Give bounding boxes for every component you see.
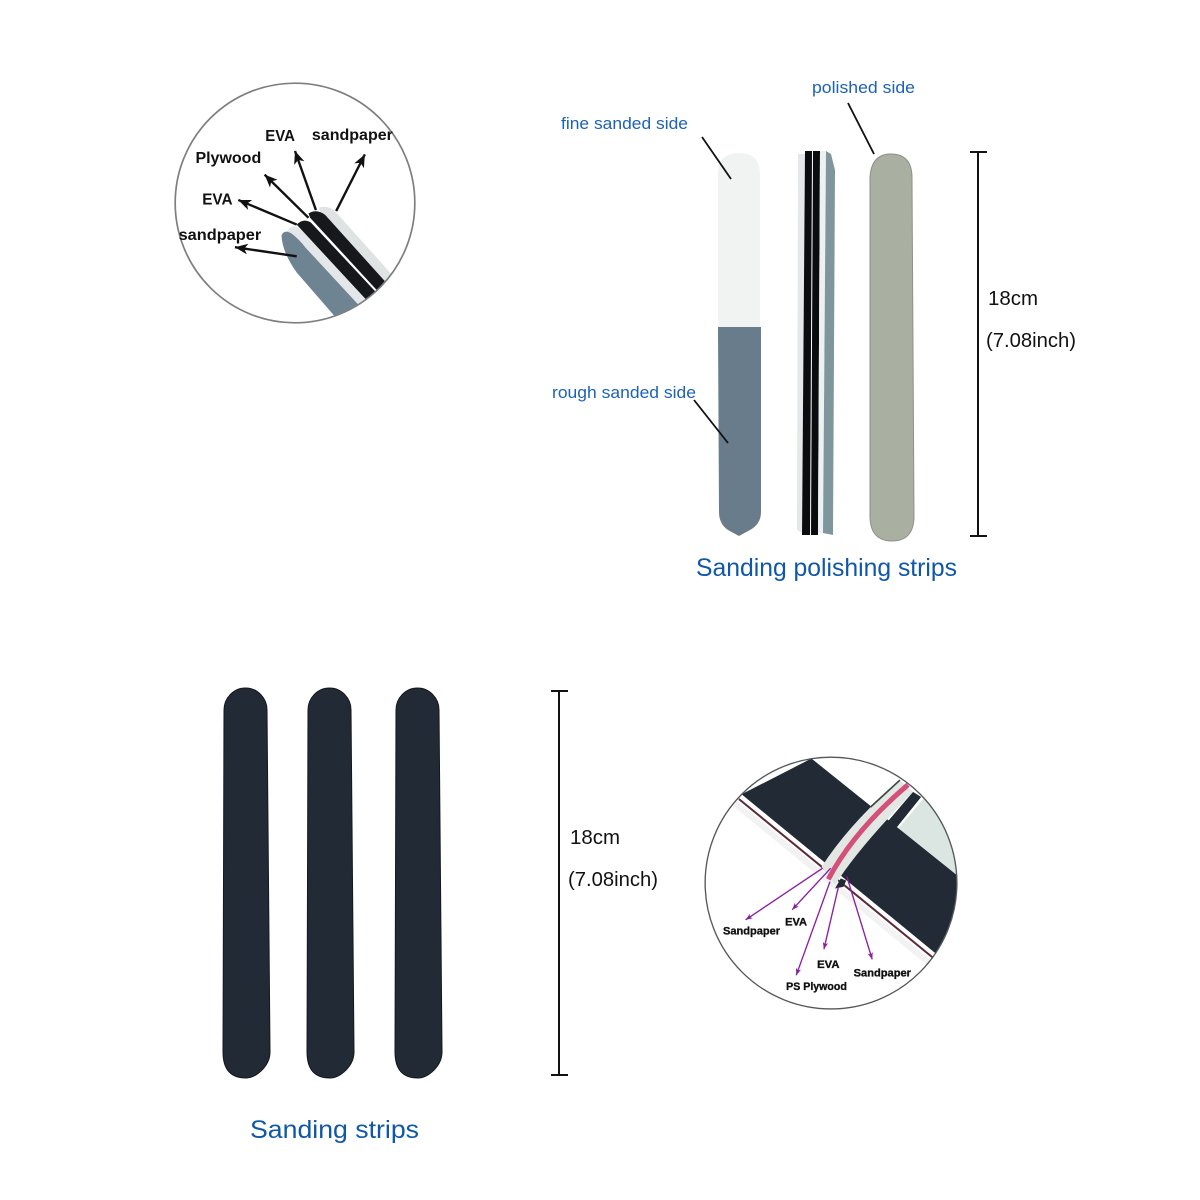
dimension text — [986, 288, 1076, 352]
strip cross section layers — [282, 207, 393, 319]
strip: polished side — [870, 154, 914, 541]
dimension text: 18cm — [570, 827, 620, 849]
panel: sanding strips — [223, 688, 658, 1144]
layer labels — [723, 917, 912, 993]
strip: side view layers — [797, 151, 835, 535]
layer labels: EVA — [785, 917, 807, 929]
layer labels: EVA — [202, 191, 233, 208]
circle outline — [705, 757, 957, 1009]
caption: Sanding strips — [250, 1116, 419, 1144]
strip: sanded sides — [718, 153, 761, 536]
leader lines — [694, 103, 874, 443]
dimension text: (7.08inch) — [568, 869, 658, 891]
purple arrows — [746, 868, 872, 975]
dimension bar — [970, 152, 987, 536]
side labels: rough sanded side — [552, 383, 696, 402]
crossed strips photo — [733, 758, 965, 968]
side labels — [552, 78, 915, 402]
layer labels: PS Plywood — [786, 981, 847, 993]
layer labels: sandpaper — [179, 227, 261, 244]
layer labels: EVA — [265, 128, 296, 145]
side labels: polished side — [812, 78, 915, 97]
layer labels: Sandpaper — [854, 968, 912, 980]
dimension text: (7.08inch) — [986, 330, 1076, 352]
caption: Sanding polishing strips — [696, 554, 957, 582]
layer labels: Sandpaper — [723, 926, 781, 938]
three dark strips — [223, 688, 442, 1078]
dimension text: 18cm — [988, 288, 1038, 310]
infographic canvas — [174, 81, 1075, 1143]
layer labels — [179, 127, 393, 244]
circle outline — [175, 83, 415, 323]
panel: layer detail circle for polishing strip — [175, 83, 415, 323]
layer labels: Plywood — [195, 150, 261, 167]
layer labels: EVA — [817, 959, 839, 971]
dimension text — [568, 827, 658, 891]
panel: polishing strips — [552, 78, 1076, 582]
dimension bar — [551, 691, 568, 1075]
layer labels: sandpaper — [312, 127, 393, 144]
panel: layer detail circle for sanding strip — [705, 757, 965, 1009]
arrows to layers — [235, 151, 365, 256]
side labels: fine sanded side — [561, 114, 688, 133]
